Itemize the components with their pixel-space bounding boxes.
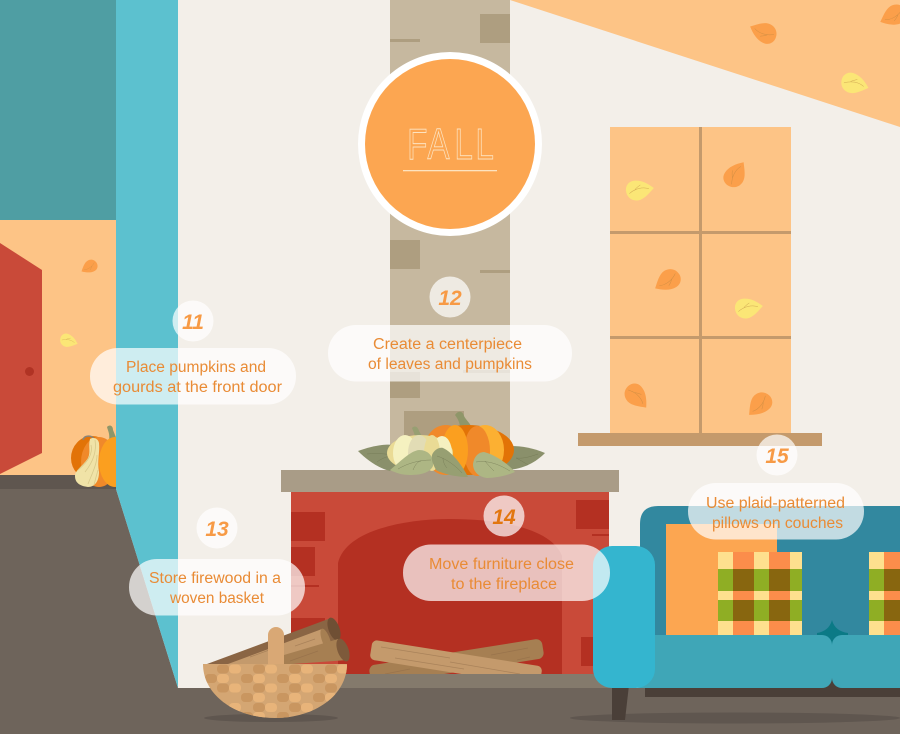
window sill	[578, 433, 822, 446]
leaf: door yellow	[58, 332, 80, 350]
door pumpkins and gourd	[71, 426, 131, 487]
callout 14: to the fireplace	[451, 576, 557, 593]
firebox arch	[338, 519, 562, 674]
leaf: door orange	[78, 257, 100, 277]
white gourd	[387, 427, 453, 471]
callout 11: 11	[182, 311, 204, 334]
callout 14	[403, 496, 610, 601]
window	[610, 127, 791, 433]
callout 15: pillows on couches	[712, 515, 843, 532]
leaf: window yellow 4	[734, 296, 764, 320]
couch arm	[593, 546, 655, 688]
fireplace logs	[369, 639, 544, 674]
entry peach wall	[0, 220, 116, 476]
dark leaf right	[504, 446, 545, 470]
leaf: window orange 3	[650, 265, 684, 297]
leaf: roof edge orange	[876, 1, 900, 31]
roof peach panel	[510, 0, 900, 127]
couch tuft star	[817, 620, 848, 650]
couch	[570, 506, 900, 724]
callout 14: Move furniture close	[429, 556, 574, 573]
door step	[0, 475, 116, 489]
large pumpkin	[422, 412, 514, 476]
exterior teal upper wall	[0, 0, 116, 220]
leaf: window orange 6	[742, 388, 776, 422]
teal door frame column	[116, 0, 178, 688]
green leaf front left	[390, 450, 433, 475]
callout 11: Place pumpkins and	[126, 359, 266, 376]
callout 14: 14	[492, 506, 516, 529]
seat cushion right	[832, 635, 900, 688]
callout 11: gourds at the front door	[113, 379, 282, 396]
callout 12: Create a centerpiece	[373, 336, 522, 353]
leaf: roof orange	[746, 17, 780, 47]
couch back	[640, 506, 900, 640]
callout 13: 13	[205, 518, 229, 541]
callout 15: 15	[765, 445, 789, 468]
centerpiece of pumpkins and leaves	[358, 412, 545, 478]
callout 13: Store firewood in a	[149, 570, 281, 587]
callout 12	[328, 276, 572, 382]
fireplace brick body	[291, 492, 609, 688]
callout 15	[688, 434, 864, 540]
callout 13	[129, 508, 305, 616]
callout 13: woven basket	[169, 590, 265, 607]
leaf: window orange 5	[620, 380, 654, 414]
leaf: window yellow 1	[625, 178, 655, 202]
callout 12: 12	[438, 287, 462, 310]
callout 15: Use plaid-patterned	[706, 495, 845, 512]
mid leaf	[432, 448, 468, 477]
leaf: window orange 2	[720, 157, 752, 191]
title badge	[358, 52, 542, 236]
basket logs	[207, 616, 352, 664]
leaf: roof yellow	[839, 71, 871, 97]
mantel	[281, 470, 619, 492]
title: FALL: FALL	[407, 121, 494, 169]
plaid pillow	[718, 552, 802, 636]
hearth	[281, 674, 619, 688]
dark leaf left	[358, 445, 402, 471]
plaid pillow right	[869, 552, 900, 636]
orange pillow	[666, 524, 777, 636]
seat cushion left	[630, 635, 832, 688]
stone chimney column	[390, 0, 510, 470]
callout 12: of leaves and pumpkins	[368, 356, 532, 373]
floor	[0, 489, 900, 734]
floor shadow	[570, 712, 900, 724]
green leaf front right	[473, 452, 515, 478]
front door	[0, 243, 42, 474]
couch base	[645, 676, 900, 697]
callout 11	[90, 300, 296, 404]
basket shadow	[204, 714, 338, 722]
woven basket	[203, 627, 349, 721]
basket handle	[268, 627, 284, 670]
couch leg	[612, 685, 629, 720]
